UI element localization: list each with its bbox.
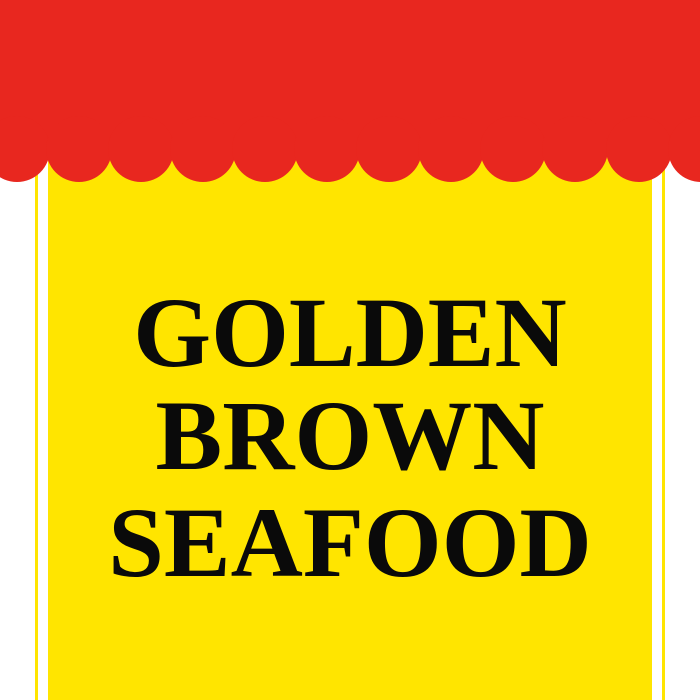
yellow panel [48,150,652,700]
title: SEAFOOD [108,487,592,598]
right thin pole [662,150,665,700]
title: GOLDEN [133,277,567,388]
left thin pole [35,150,38,700]
title: BROWN [156,380,544,491]
